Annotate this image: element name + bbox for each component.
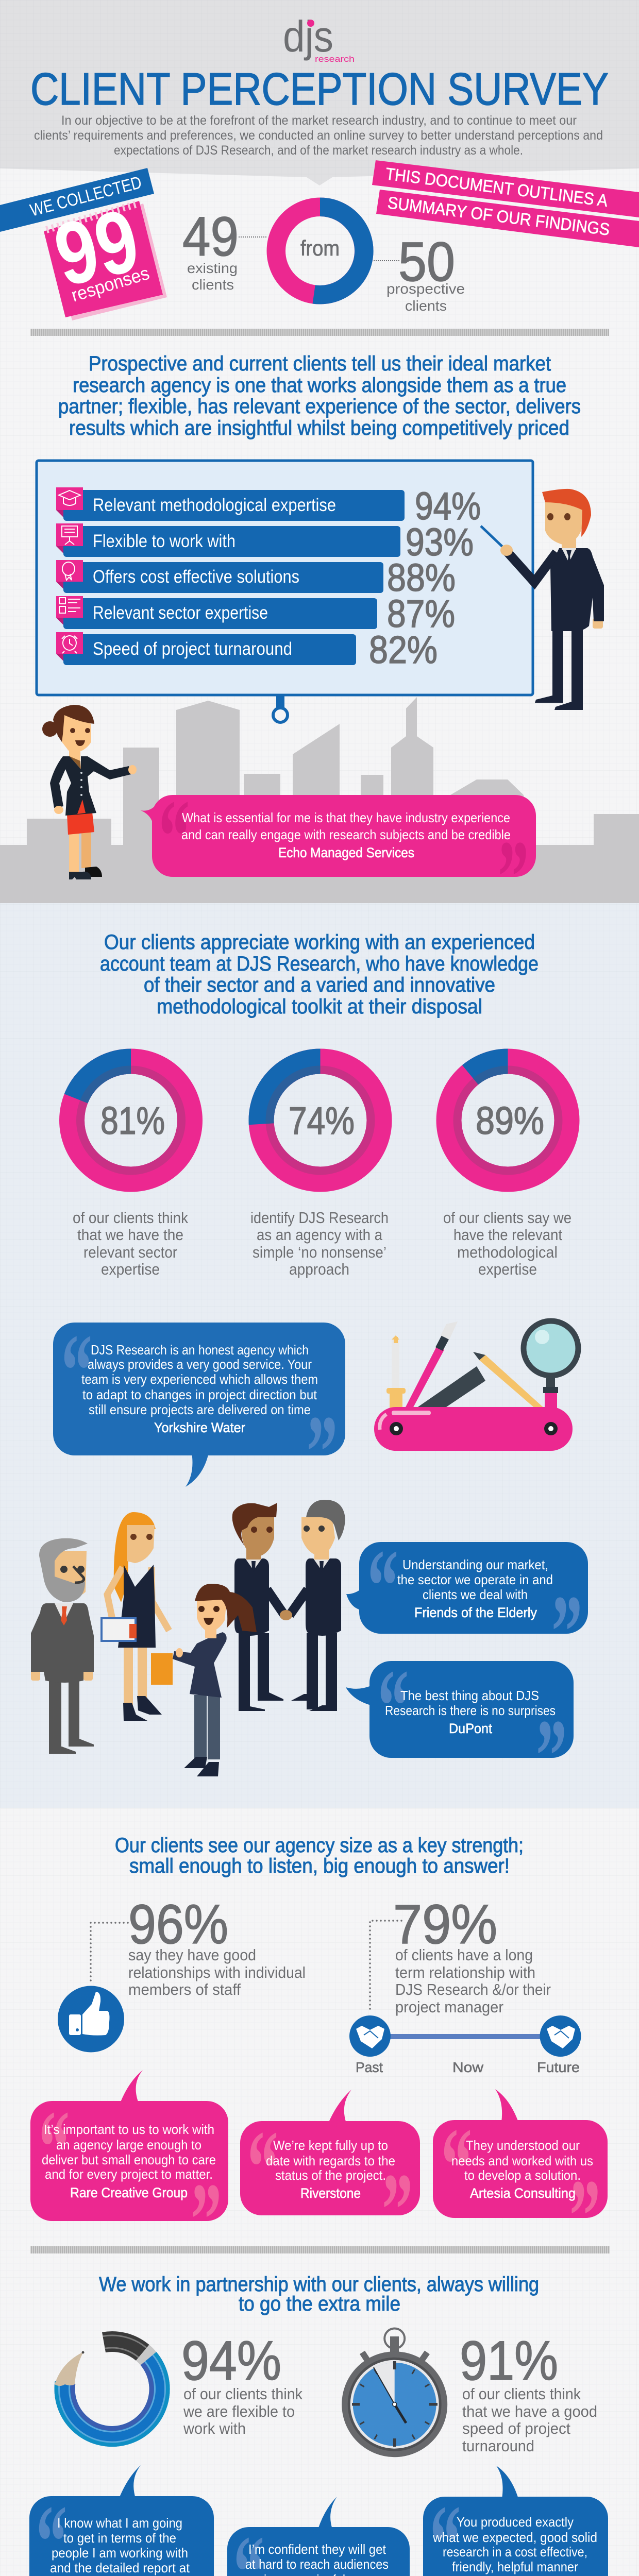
stat: 94% flexible: we are flexible to (183, 2402, 295, 2420)
stat: 96% good relationships: 96% (128, 1893, 228, 1955)
calendar: 99 responses: responses (69, 262, 152, 306)
quote: Yorkshire Water: team is very experienced which allows them (81, 1371, 318, 1387)
quote: Yorkshire Water: DJS Research is an honest agency which (91, 1342, 309, 1358)
stat: 91% speed: 91% (460, 2329, 558, 2392)
bar: speed 82%: Speed of project turnaround (93, 639, 292, 659)
skyline (0, 697, 639, 903)
quote: Riverstone: status of the project. (275, 2167, 386, 2183)
stat: 49 existing clients: clients (192, 277, 234, 293)
stat: 79% long term relationship (370, 1893, 551, 2016)
quote: Echo Managed Services: “ (159, 779, 190, 895)
quote: Artesia Consulting: to develop a solution. (464, 2167, 581, 2183)
bar: cost effective 88% (56, 556, 456, 599)
quote: Yorkshire Water: ” (307, 1395, 338, 1511)
banner: document outlines summary: SUMMARY OF OUR FINDINGS (386, 193, 611, 239)
quote: Echo Managed Services: and can really engage with research subjects and be credible (181, 827, 511, 842)
logo: djs research header: research (315, 54, 355, 64)
donut: 74%: 74% (289, 1099, 355, 1142)
quote: DuPont: ” (536, 1699, 567, 1815)
caption: 74%: simple ‘no nonsense’ (253, 1243, 386, 1261)
quote: DuPont: The best thing about DJS (400, 1688, 539, 1703)
quote: Rare Creative Group: and for every project to matter. (45, 2166, 213, 2182)
bar: cost effective 88%: 88% (387, 556, 456, 599)
stat: 79% long term relationship: project manager (395, 1998, 503, 2016)
stat: 94% flexible: of our clients think (183, 2385, 302, 2403)
heading: agency size: Our clients see our agency size as a key strength; (115, 1834, 524, 1857)
quote: Rare Creative Group: ” (191, 2162, 222, 2278)
quote: Riverstone: date with regards to the (266, 2153, 395, 2168)
quote: Riverstone: Riverstone (300, 2185, 361, 2201)
heading: partnership (99, 2273, 539, 2315)
figure: woman (42, 705, 137, 879)
quote: Yorkshire Water: still ensure projects are delivered on time (89, 1402, 311, 1417)
donut: 81%: 81% (100, 1099, 165, 1142)
stat: 91% speed: that we have a good (462, 2402, 597, 2420)
presentation board (37, 461, 533, 722)
heading: experienced account team: of their sector and a varied and innovative (144, 974, 495, 996)
caption: 89%: expertise (478, 1260, 537, 1278)
quote: Echo Managed Services: What is essential for me is that they have industry experience (182, 810, 510, 825)
quote: Rare Creative Group: “ (39, 2090, 70, 2206)
stat: 96% good relationships: members of staff (128, 1980, 241, 1998)
figure: man shaking hands, grey hair (280, 1500, 345, 1711)
bar: methodological expertise 94% (56, 484, 481, 528)
quote: Riverstone: We’re kept fully up to (273, 2138, 388, 2153)
bar: methodological expertise 94%: 94% (415, 484, 481, 528)
quote: Yorkshire Water: to adapt to changes in project direction but (82, 1387, 317, 1402)
quote: Rare Creative Group, cost effective: research in a cost effective, (443, 2544, 587, 2560)
caption: 81%: of our clients think (73, 1209, 188, 1227)
heading: experienced account team: Our clients appreciate working with an experienced (104, 931, 535, 954)
stat: 96% good relationships: say they have good (128, 1946, 256, 1964)
timeline: past now future: Past (356, 2059, 383, 2075)
stat: 91% speed: of our clients think (462, 2385, 581, 2403)
quote: Echo Managed Services: Echo Managed Services (278, 845, 414, 860)
caption: 74%: approach (289, 1260, 349, 1278)
quote: Artesia Consulting: They understood our (466, 2138, 580, 2153)
stat: 49 existing clients: existing (187, 260, 238, 276)
stat: 79% long term relationship: of clients have a long (395, 1946, 533, 1964)
banner: document outlines summary (372, 160, 639, 247)
bar: flexible 93%: 93% (406, 520, 474, 564)
stat: 49 existing clients (182, 205, 267, 293)
quote: DuPont (346, 1649, 574, 1815)
caption: 81%: relevant sector (83, 1243, 177, 1261)
quote: Yorkshire Water: always provides a very good service. Your (88, 1357, 312, 1372)
logo: djs research header: djs (283, 12, 333, 61)
caption: 74% (250, 1209, 389, 1278)
intro text: expectations of DJS Research, and of the market research industry as a whole. (114, 143, 523, 158)
donut: 89% (449, 1061, 567, 1179)
stat: 50 prospective clients: clients (405, 298, 447, 314)
figure: presenter man (481, 489, 604, 710)
donut chart: 49 from 99: from (300, 236, 340, 260)
bar: cost effective 88%: Offers cost effective solutions (93, 567, 299, 587)
calendar: 99 responses: 99 (46, 190, 147, 305)
caption: 74%: identify DJS Research (250, 1209, 389, 1227)
quote: Rare Creative Group: an agency large enough to (56, 2137, 201, 2153)
quote: Yorkshire Water (53, 1313, 345, 1511)
banner: we collected: WE COLLECTED (28, 173, 144, 221)
bar: sector expertise 87%: 87% (387, 592, 455, 635)
quote: DuPont: Research is there is no surprises (385, 1703, 556, 1718)
bar: methodological expertise 94%: Relevant methodological expertise (93, 495, 336, 515)
stat: 79% long term relationship: DJS Research &/or their (395, 1980, 551, 1998)
quote: Artesia Consulting: Artesia Consulting (470, 2185, 576, 2201)
stat: 94% flexible: 94% (181, 2329, 281, 2392)
heading: agency size: small enough to listen, big enough to answer! (129, 1855, 510, 1877)
stat: 94% flexible: work with (183, 2419, 246, 2437)
quote: Rare Creative Group, cost effective: You produced exactly (457, 2514, 574, 2530)
quote: Riverstone: “ (247, 2110, 278, 2226)
stat: 50 prospective clients (374, 230, 465, 314)
stat: 91% speed (460, 2329, 597, 2455)
intro text (34, 113, 603, 158)
stat: 96% good relationships (91, 1893, 306, 1998)
bar: sector expertise 87% (56, 592, 455, 635)
quote: Echo Managed Services: ” (498, 820, 529, 936)
stat: 94% flexible (181, 2329, 302, 2437)
quote: Friends of the Elderly: “ (367, 1529, 398, 1645)
donut: 74% (261, 1061, 379, 1179)
icon: stopwatch (342, 2329, 447, 2457)
quote: The Open University: at hard to reach audiences (245, 2556, 389, 2572)
donut chart: 49 from 99 (276, 207, 364, 295)
quote: DuPont: DuPont (449, 1721, 492, 1736)
heading: experienced account team: methodological toolkit at their disposal (157, 995, 482, 1018)
caption: 81%: expertise (101, 1260, 160, 1278)
figure: woman shaking hands with bag (151, 1584, 257, 1776)
caption: 81% (73, 1209, 188, 1278)
heading: ideal agency: Prospective and current clients tell us their ideal market (89, 352, 551, 375)
quote: Friends of the Elderly: clients we deal with (423, 1587, 528, 1602)
quote: Riverstone: ” (382, 2153, 413, 2268)
timeline: past now future: Future (537, 2059, 580, 2075)
donut: 81% (72, 1061, 190, 1179)
quote: Rare Creative Group: It’s important to us to work with (44, 2122, 214, 2137)
caption: 81%: that we have the (77, 1226, 183, 1244)
bar: flexible 93% (56, 520, 474, 564)
quote: Yorkshire Water: Yorkshire Water (154, 1420, 245, 1435)
icon: pencil ring (55, 2335, 168, 2445)
quote: DuPont: “ (378, 1649, 409, 1765)
quote: Rare Creative Group (30, 2070, 228, 2278)
caption: 89%: methodological (457, 1243, 558, 1261)
timeline: past now future: Now (452, 2059, 484, 2075)
quote: Rare Creative Group: Rare Creative Group (70, 2185, 188, 2200)
quote: Molnlycke Healthcare: people I am working with (52, 2545, 188, 2561)
caption: 89% (443, 1209, 571, 1278)
bar chart: agency qualities (56, 484, 481, 671)
quote: Friends of the Elderly: the sector we operate in and (397, 1572, 553, 1587)
stat: 50 prospective clients: prospective (386, 281, 465, 297)
caption: 74%: as an agency with a (257, 1226, 383, 1244)
quote: Molnlycke Healthcare (29, 2465, 214, 2576)
banner: we collected (0, 168, 154, 232)
stat: 79% long term relationship: 79% (393, 1893, 497, 1955)
quote: The Open University: I’m confident they will get (248, 2541, 386, 2557)
heading: ideal agency: partner; flexible, has relevant experience of the sector, delivers (58, 395, 581, 418)
stat: 50 prospective clients: 50 (398, 230, 455, 293)
quote: Artesia Consulting: ” (569, 2159, 600, 2275)
quote: Friends of the Elderly: Understanding our market, (402, 1557, 548, 1572)
icon: thumbs up (58, 1986, 124, 2053)
quote: Yorkshire Water: “ (61, 1313, 92, 1429)
heading: partnership: We work in partnership with our clients, always willing (99, 2273, 539, 2296)
bar: sector expertise 87%: Relevant sector expertise (93, 603, 268, 623)
quote: Molnlycke Healthcare: I know what I am going (57, 2515, 182, 2531)
figure: woman with clipboard (102, 1512, 169, 1721)
heading: ideal agency (58, 352, 581, 439)
quote: The Open University (227, 2497, 410, 2576)
quote: Artesia Consulting (433, 2089, 608, 2275)
figure: man shaking hands, brown hair (232, 1503, 284, 1711)
quote: Rare Creative Group: deliver but small enough to care (42, 2152, 216, 2167)
donut: 89%: 89% (476, 1099, 544, 1142)
caption: 89%: have the relevant (453, 1226, 562, 1244)
bar: speed 82%: 82% (369, 628, 438, 671)
quote: Artesia Consulting: “ (441, 2107, 472, 2223)
heading: ideal agency: research agency is one that works alongside them as a true (73, 374, 566, 397)
timeline: past now future (349, 2015, 581, 2075)
stat: 91% speed: turnaround (462, 2437, 534, 2455)
banner: document outlines summary: THIS DOCUMENT OUTLINES A (384, 164, 609, 210)
heading: experienced account team (100, 931, 539, 1018)
stat: 49 existing clients: 49 (182, 205, 239, 267)
heading: experienced account team: account team at DJS Research, who have knowledge (100, 953, 539, 975)
quote: Friends of the Elderly (346, 1529, 588, 1690)
icon: toolkit penknife (374, 1321, 578, 1451)
quote: Echo Managed Services (141, 779, 536, 936)
heading: agency size (115, 1834, 524, 1877)
intro text: clients’ requirements and preferences, we conducted an online survey to better understand perceptions and (34, 128, 603, 143)
bar: speed 82% (56, 628, 438, 671)
stat: 79% long term relationship: term relationship with (395, 1963, 535, 1981)
caption: 89%: of our clients say we (443, 1209, 571, 1227)
quote: Friends of the Elderly: Friends of the Elderly (414, 1605, 537, 1620)
bar: flexible 93%: Flexible to work with (93, 531, 236, 551)
heading: partnership: to go the extra mile (239, 2293, 400, 2315)
quote: Rare Creative Group, cost effective: friendly, helpful manner (452, 2559, 578, 2574)
figure: older man in grey suit (31, 1538, 94, 1754)
quote: Rare Creative Group, cost effective: what we expected, good solid (432, 2530, 597, 2545)
quote: Friends of the Elderly: ” (551, 1574, 582, 1690)
quote: Artesia Consulting: needs and worked with us (451, 2153, 593, 2168)
figure: team of five (31, 1500, 345, 1776)
quote: Molnlycke Healthcare: and the detailed report at (50, 2560, 190, 2575)
quote: Riverstone (240, 2090, 420, 2268)
stat: 91% speed: speed of project (462, 2419, 570, 2437)
intro text: In our objective to be at the forefront of the market research industry, and to continue to meet our (61, 113, 577, 128)
quote: Molnlycke Healthcare: to get in terms of the (63, 2530, 176, 2546)
quote: Rare Creative Group, cost effective (423, 2466, 608, 2576)
heading: ideal agency: results which are insightful whilst being competitively priced (69, 417, 569, 439)
stat: 96% good relationships: relationships with individual (128, 1963, 306, 1981)
